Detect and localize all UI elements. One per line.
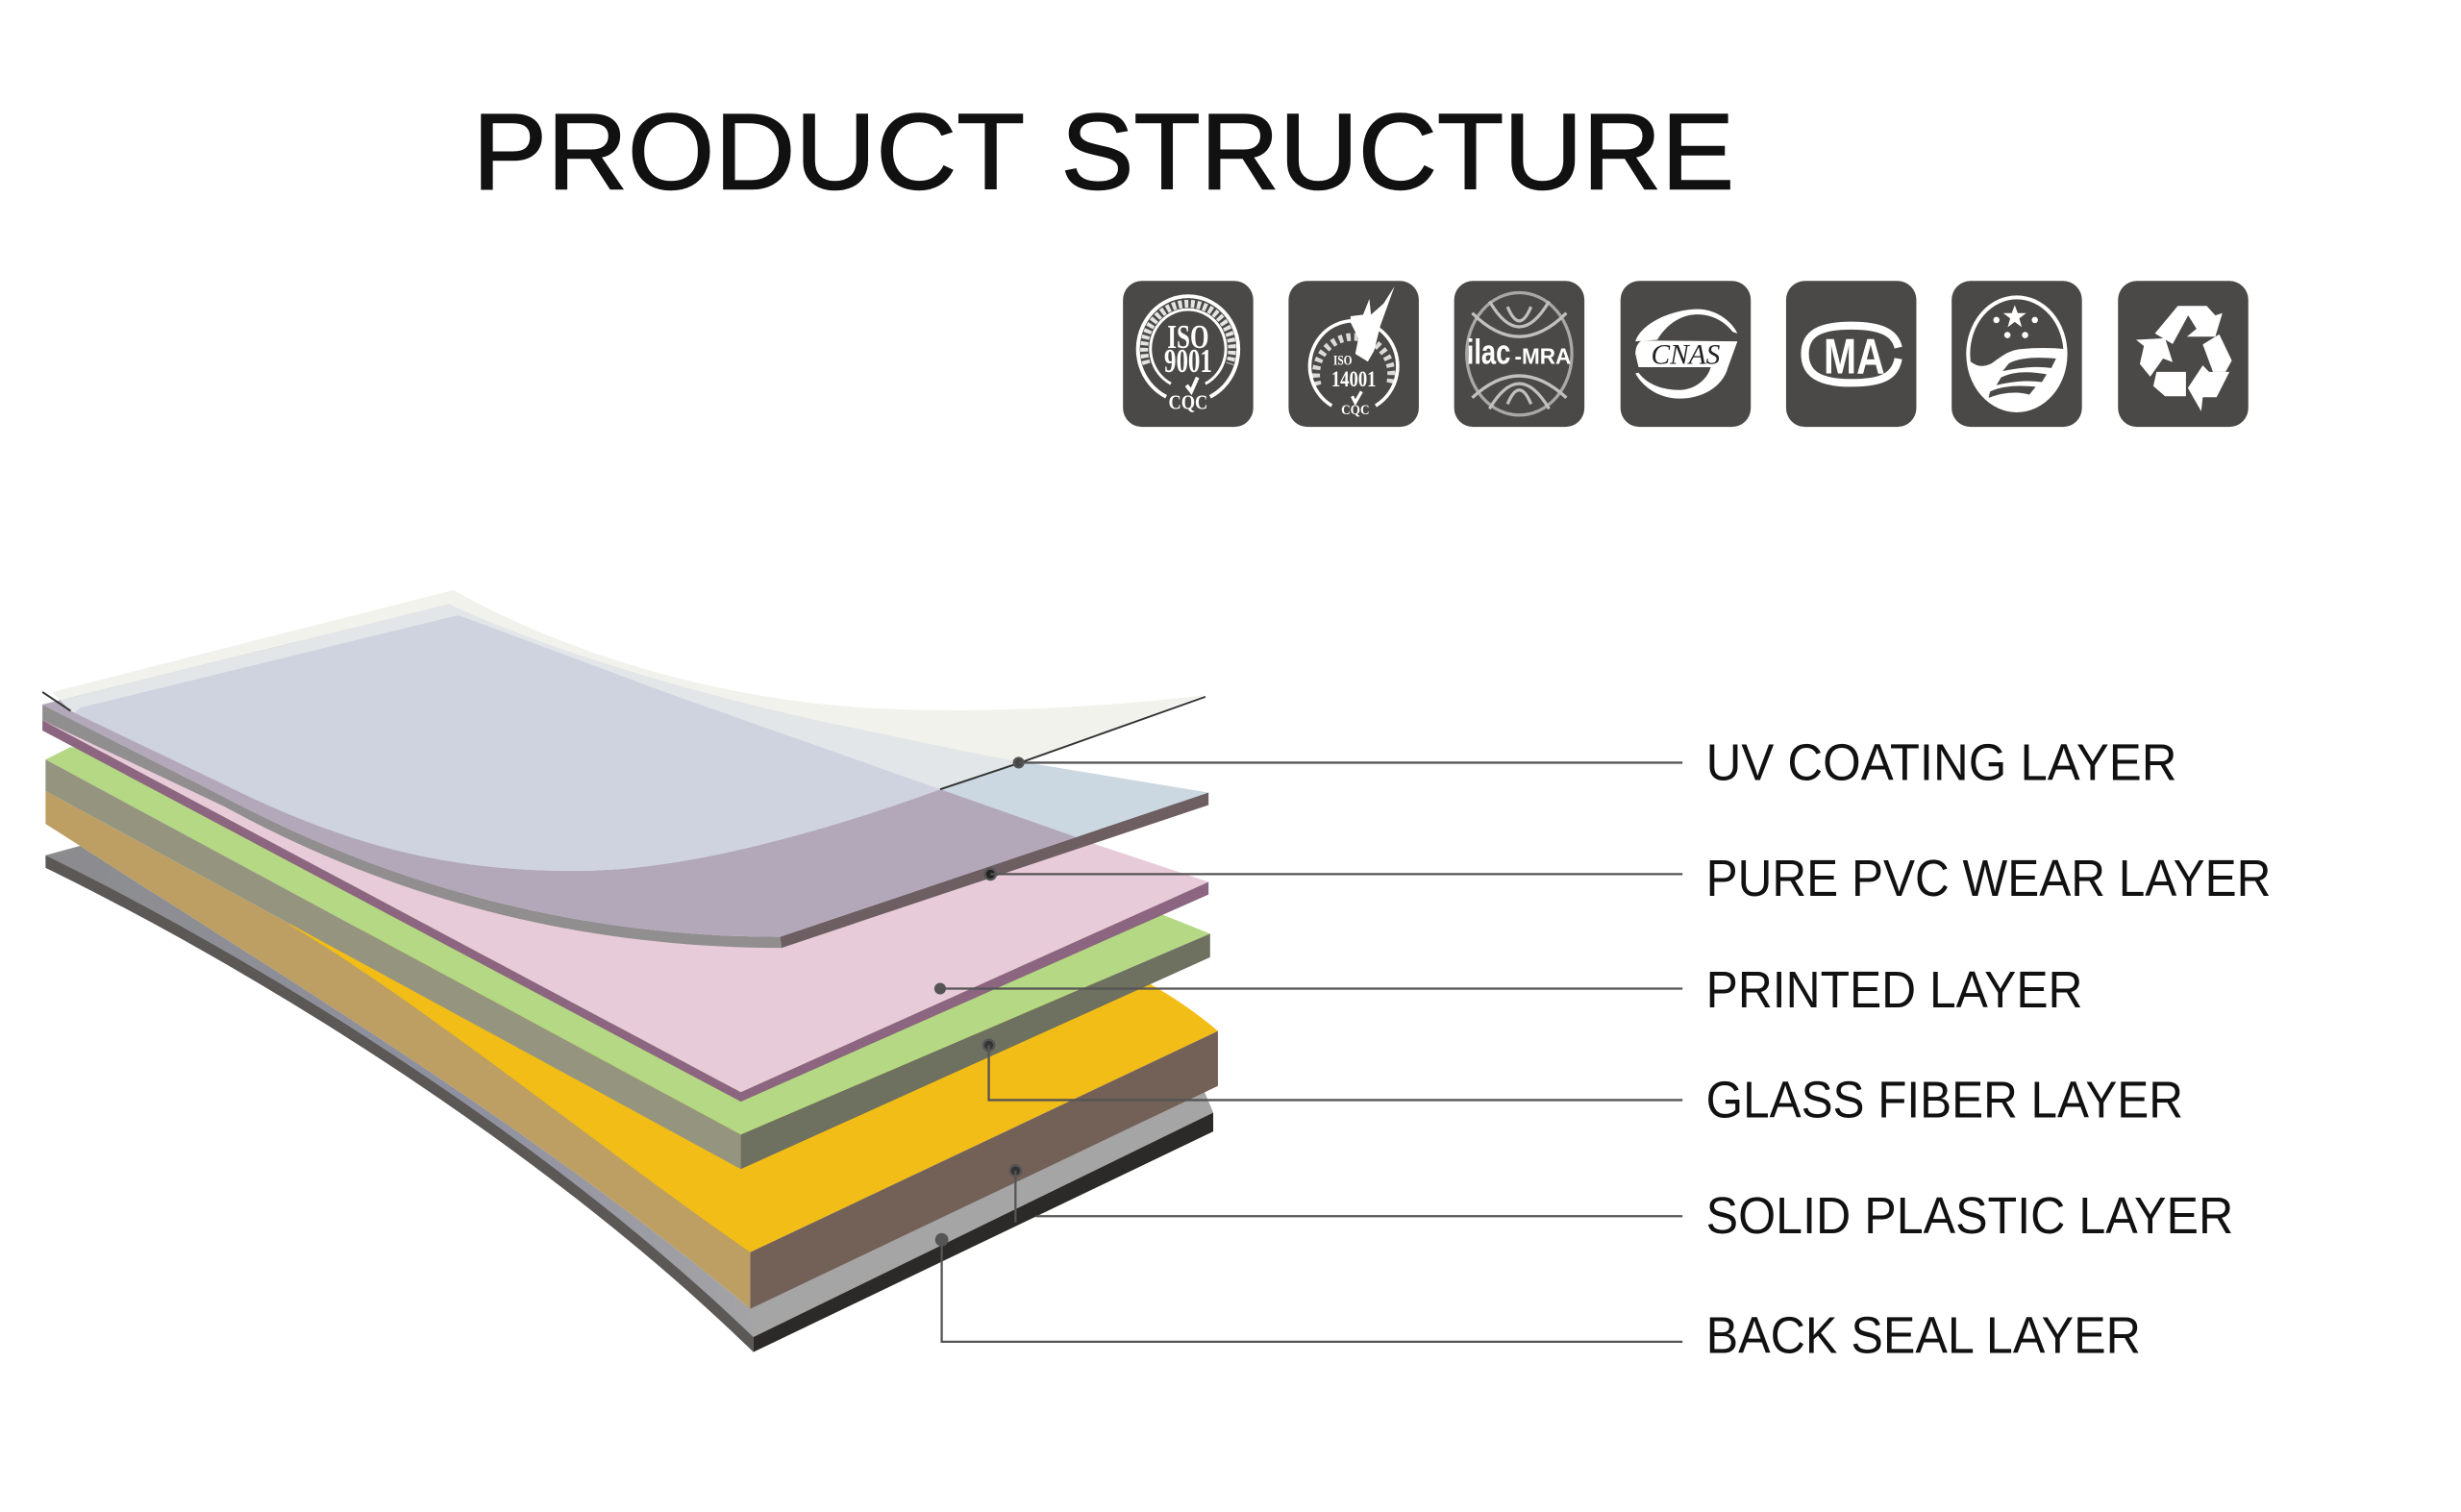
badge: ISO 14001: 14001: [1331, 367, 1377, 391]
badge: ISO 14001: ISO: [1333, 354, 1353, 369]
layer: glass fiber: [45, 747, 1210, 1169]
badge: CMA: [1786, 281, 1916, 427]
label: printed layer: PRINTED LAYER: [1706, 961, 2082, 1019]
layer: pure PVC wear: [42, 604, 1209, 948]
layer: printed: [42, 659, 1208, 1102]
label: UV coating layer: UV COATING LAYER: [1706, 733, 2176, 791]
badge: ISO 9001: [1123, 281, 1254, 427]
badge: ISO 9001: ISO: [1167, 318, 1209, 356]
leader: printed: [935, 984, 1682, 993]
leader: back seal: [936, 1234, 1682, 1342]
title: [472, 91, 1734, 212]
badge: recycling: [2118, 281, 2249, 427]
layer labels: [1706, 733, 2271, 1364]
layered flooring diagram: [0, 565, 1255, 1352]
UV film front edge: [42, 692, 1206, 789]
label: back seal layer: BACK SEAL LAYER: [1706, 1306, 2141, 1364]
badge: ilac-MRA: ilac: [1467, 332, 1510, 371]
leader lines: [935, 758, 1682, 1342]
badge: ISO 9001: 9001: [1164, 342, 1212, 380]
title: STRUCTURE: [1061, 91, 1734, 212]
leader: UV coating: [1014, 758, 1682, 767]
badge: CMA: MA: [1824, 330, 1885, 385]
layer: solid plastic: [45, 791, 1218, 1309]
label: solid plastic layer: SOLID PLASTIC LAYER: [1706, 1187, 2233, 1245]
badge: ISO 14001: CQC: [1341, 403, 1369, 418]
layer: UV coating film: [52, 590, 1204, 816]
badge: ilac-MRA: -MRA: [1514, 343, 1571, 368]
leader: glass fiber: [983, 1040, 1682, 1100]
badge: national flag and waves: [1951, 281, 2082, 427]
badge: CNAS: [1621, 281, 1751, 427]
badge: CNAS: CNAS: [1652, 339, 1721, 370]
badge: ISO 9001: CQC: [1169, 390, 1207, 413]
title: PRODUCT: [472, 91, 1025, 212]
label: pure PVC wear layer: PURE PVC WEAR LAYER: [1706, 850, 2271, 907]
certification badges: [1123, 281, 2249, 427]
label: glass fiber layer: GLASS FIBER LAYER: [1706, 1071, 2183, 1128]
layer: back seal: [45, 846, 1213, 1352]
leader: wear layer: [984, 869, 1682, 880]
badge: ilac-MRA: [1454, 281, 1584, 427]
leader: solid plastic: [1010, 1165, 1682, 1223]
badge: ISO 14001: [1288, 281, 1419, 427]
